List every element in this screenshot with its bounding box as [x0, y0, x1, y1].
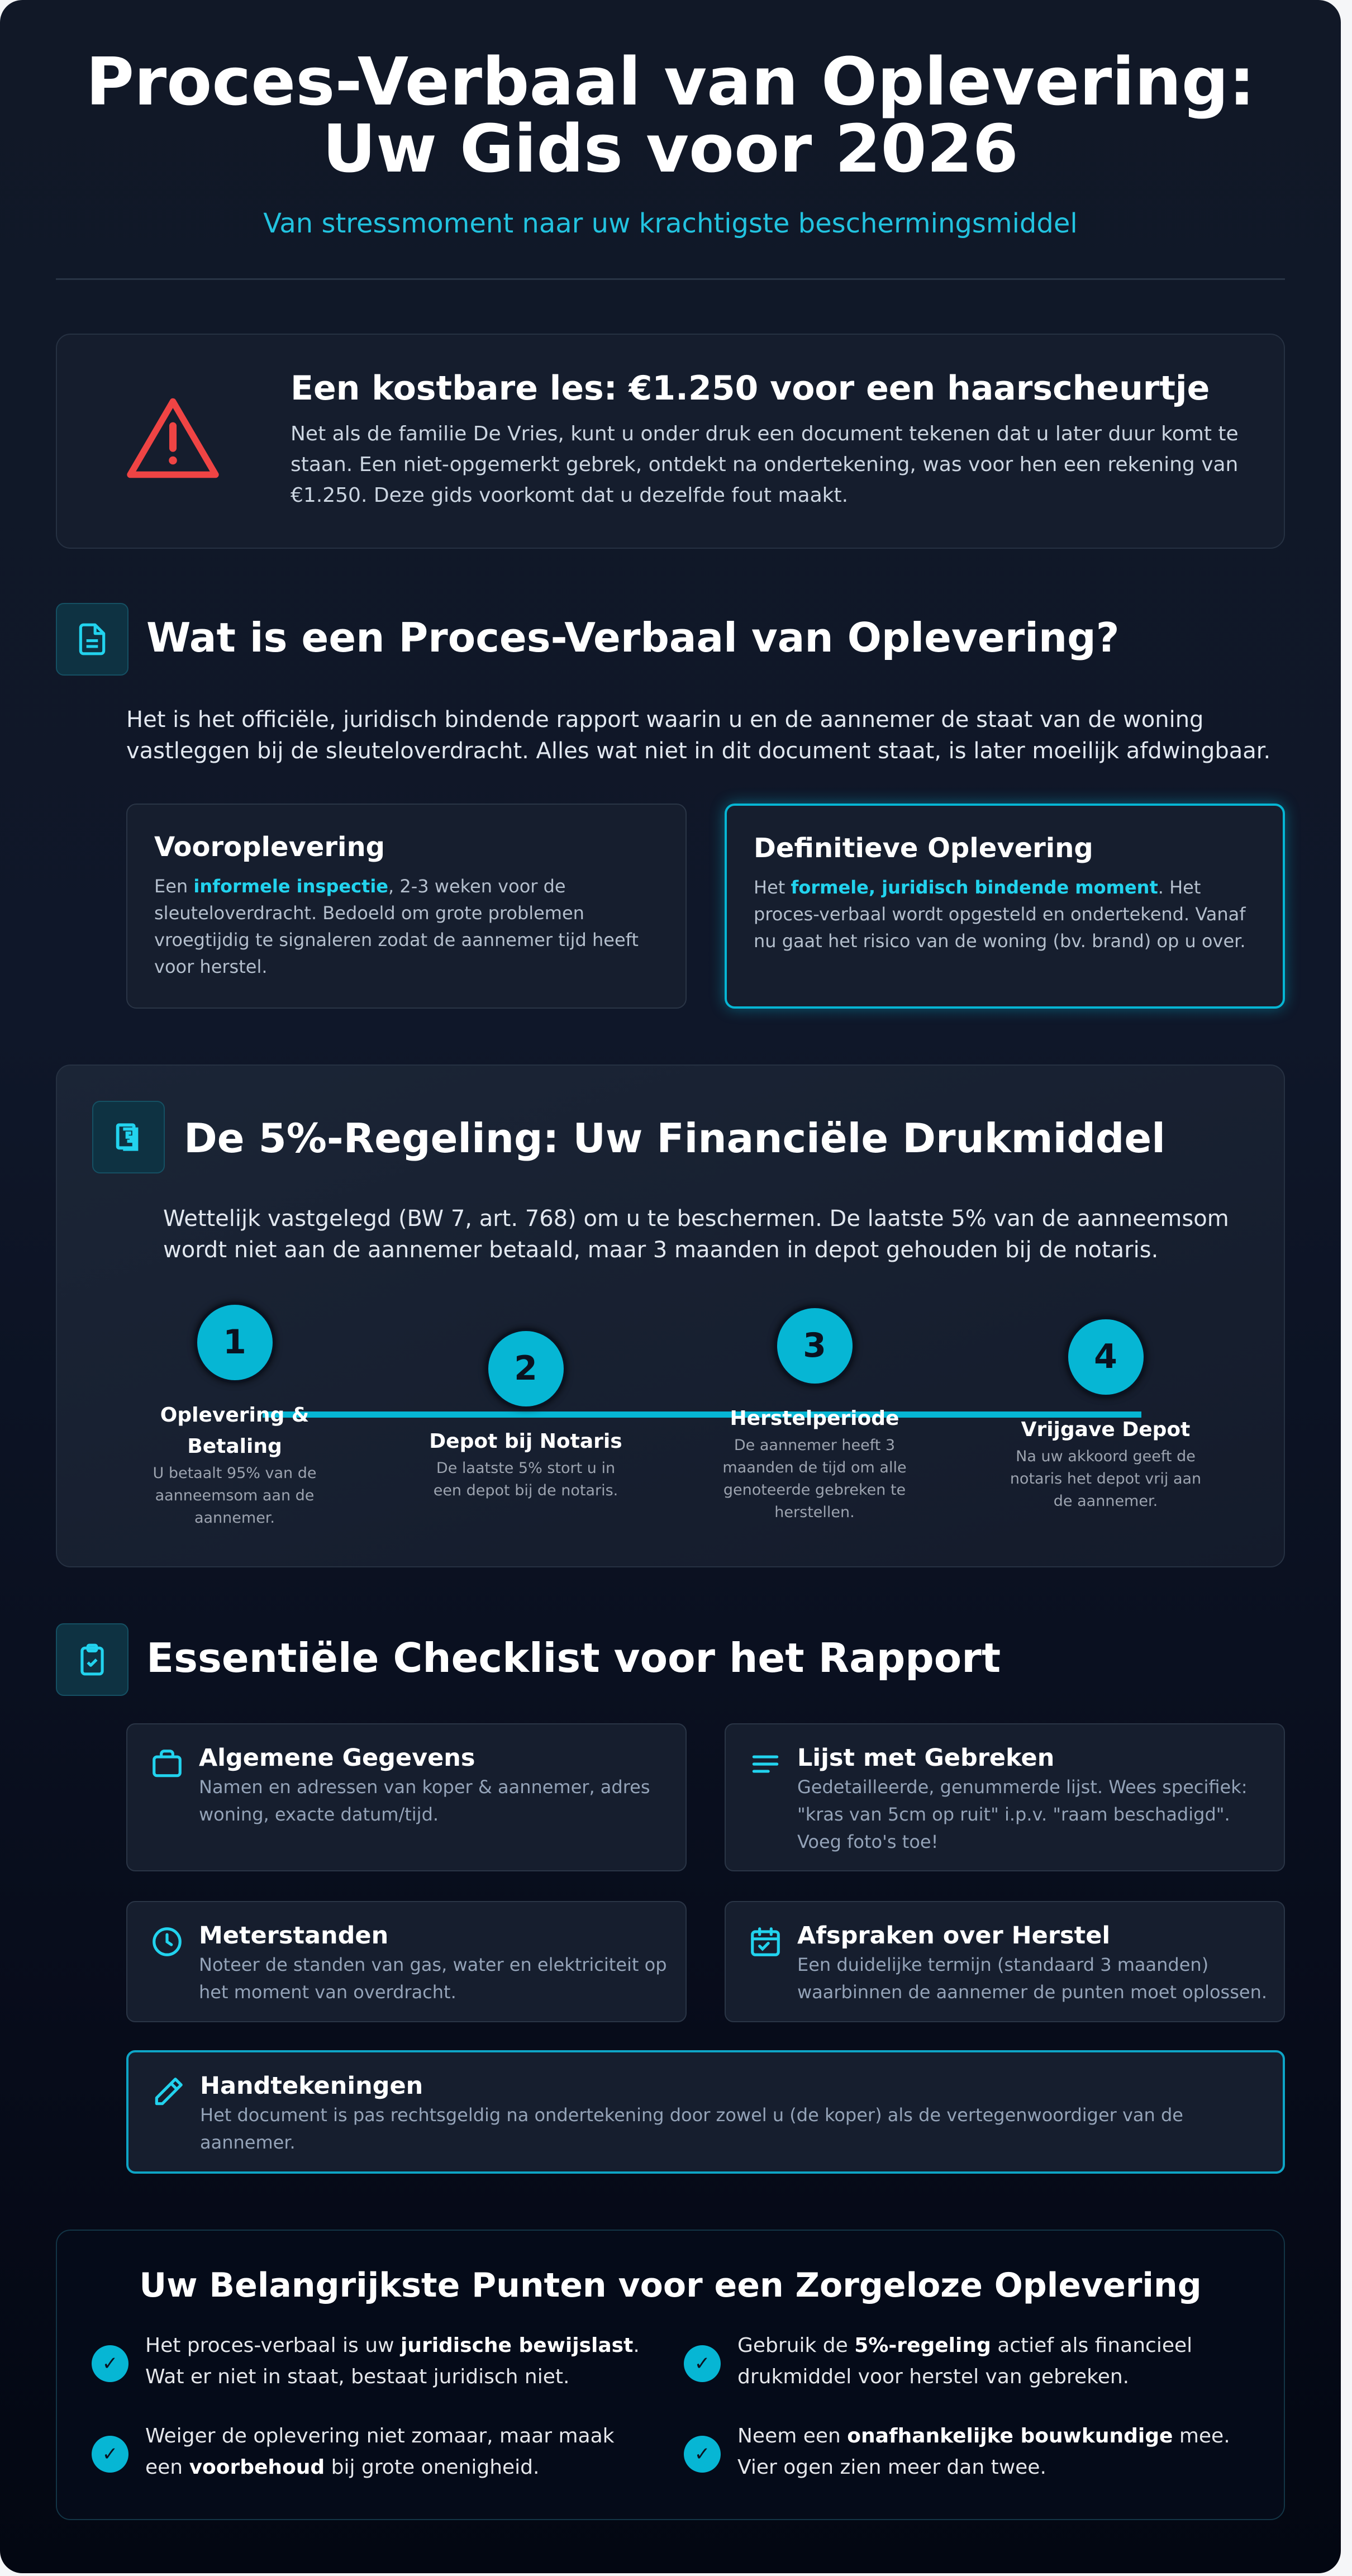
panel: alert: [56, 334, 1285, 549]
takeaway 3: ✓: [102, 2443, 118, 2465]
step 1: U betaalt 95% van de aanneemsom aan de aannemer.: [153, 1465, 316, 1527]
icon: money: [92, 1101, 165, 1173]
takeaways heading: Uw Belangrijkste Punten voor een Zorgeloze Oplevering: [139, 2266, 1202, 2305]
icon: clipboard: [56, 1623, 128, 1696]
check: algemene gegevens: [126, 1723, 687, 1871]
card: vooroplevering: [126, 804, 687, 1009]
takeaway 3: Weiger de oplevering niet zomaar, maar maak een voorbehoud bij grote onenigheid.: [145, 2425, 615, 2479]
card: vooroplevering: Vooroplevering: [154, 831, 385, 863]
check: handtekeningen: Handtekeningen: [200, 2072, 423, 2100]
title: Uw Gids voor 2026: [322, 110, 1018, 187]
step 2: 2: [514, 1349, 537, 1388]
step 2: Depot bij Notaris: [429, 1430, 622, 1453]
check: algemene gegevens: Algemene Gegevens: [199, 1744, 475, 1772]
check: handtekeningen: Het document is pas rechtsgeldig na ondertekening door zowel u (de koper) als de vertegenwoordiger van de aannemer.: [200, 2104, 1183, 2153]
icon: document: [56, 603, 128, 676]
check: meterstanden: Noteer de standen van gas, water en elektriciteit op het moment van overdracht.: [199, 1954, 667, 2003]
check: meterstanden: [126, 1901, 687, 2022]
check: handtekeningen: [126, 2050, 1285, 2174]
step 2: [429, 1326, 622, 1499]
check: lijst met gebreken: [725, 1723, 1285, 1871]
alert text: Net als de familie De Vries, kunt u onder druk een document tekenen dat u later duur komt te staan. Een niet-opgemerkt gebrek, ontdekt na ondertekening, was voor hen een rekening van €1.250. Deze gids voorkomt dat u dezelfde fout maakt.: [291, 422, 1239, 507]
takeaway 1: Het proces-verbaal is uw juridische bewijslast. Wat er niet in staat, bestaat juridisch niet.: [145, 2334, 640, 2388]
check: lijst met gebreken: Lijst met Gebreken: [797, 1744, 1054, 1772]
takeaway 1: ✓: [102, 2352, 118, 2375]
step 3: Herstelperiode: [730, 1407, 899, 1430]
heading: wat is: Wat is een Proces-Verbaal van Oplevering?: [146, 614, 1119, 661]
heading: checklist: Essentiële Checklist voor het Rapport: [146, 1634, 1001, 1681]
timeline: [153, 1300, 1201, 1527]
step 3: 3: [803, 1326, 826, 1365]
check: algemene gegevens: Namen en adressen van koper & aannemer, adres woning, exacte datum/tijd.: [199, 1776, 650, 1825]
text: 5%: Wettelijk vastgelegd (BW 7, art. 768) om u te beschermen. De laatste 5% van de aanneemsom wordt niet aan de aannemer betaald, maar 3 maanden in depot gehouden bij de notaris.: [163, 1206, 1229, 1263]
panel: takeaways: [56, 2230, 1285, 2520]
title: [86, 43, 1255, 187]
check: lijst met gebreken: Gedetailleerde, genummerde lijst. Wees specifiek: "kras van 5cm op ruit" i.p.v. "raam beschadigd". Voeg foto's toe!: [797, 1776, 1248, 1852]
step 3: [722, 1303, 907, 1521]
takeaway 2: ✓: [694, 2352, 710, 2375]
intro text: Het is het officiële, juridisch bindende rapport waarin u en de aannemer de staat van de woning vastleggen bij de sleuteloverdracht. Alles wat niet in dit document staat, is later moeilijk afdwingbaar.: [126, 707, 1270, 764]
check: afspraken: Afspraken over Herstel: [797, 1922, 1110, 1950]
step 1: Oplevering & Betaling: [160, 1404, 309, 1458]
check: afspraken: Een duidelijke termijn (standaard 3 maanden) waarbinnen de aannemer de punten moet oplossen.: [797, 1954, 1267, 2003]
alert heading: Een kostbare les: €1.250 voor een haarscheurtje: [291, 369, 1210, 408]
step 4: Vrijgave Depot: [1021, 1418, 1190, 1441]
step 1: 1: [223, 1323, 246, 1362]
title: Proces-Verbaal van Oplevering:: [86, 43, 1255, 120]
takeaway 2: Gebruik de 5%-regeling actief als financieel drukmiddel voor herstel van gebreken.: [737, 2334, 1192, 2388]
check: meterstanden: Meterstanden: [199, 1922, 388, 1950]
card: definitieve oplevering: Definitieve Oplevering: [754, 833, 1093, 864]
step 3: De aannemer heeft 3 maanden de tijd om alle genoteerde gebreken te herstellen.: [722, 1437, 907, 1521]
step 2: De laatste 5% stort u in een depot bij de notaris.: [434, 1460, 618, 1499]
takeaway 4: ✓: [694, 2443, 710, 2465]
card: definitieve oplevering: Het formele, juridisch bindende moment. Het proces-verbaal wordt opgesteld en ondertekend. Vanaf nu gaat het risico van de woning (bv. brand) op u over.: [754, 877, 1246, 952]
check: afspraken: [725, 1901, 1285, 2022]
step 4: Na uw akkoord geeft de notaris het depot vrij aan de aannemer.: [1010, 1448, 1201, 1510]
card: vooroplevering: Een informele inspectie, 2-3 weken voor de sleuteloverdracht. Bedoeld om grote problemen vroegtijdig te signaleren zodat de aannemer tijd heeft voor herstel.: [154, 876, 639, 977]
card: definitieve oplevering: [725, 804, 1285, 1009]
step 1: [153, 1300, 316, 1527]
takeaway 4: Neem een onafhankelijke bouwkundige mee. Vier ogen zien meer dan twee.: [737, 2425, 1230, 2479]
step 4: [1010, 1314, 1201, 1510]
subtitle: Van stressmoment naar uw krachtigste beschermingsmiddel: [263, 208, 1078, 239]
heading: 5%: De 5%-Regeling: Uw Financiële Drukmiddel: [184, 1115, 1165, 1162]
step 4: 4: [1094, 1337, 1117, 1376]
icon: warning triangle: [127, 398, 219, 478]
panel: 5% regeling: [56, 1064, 1285, 1567]
